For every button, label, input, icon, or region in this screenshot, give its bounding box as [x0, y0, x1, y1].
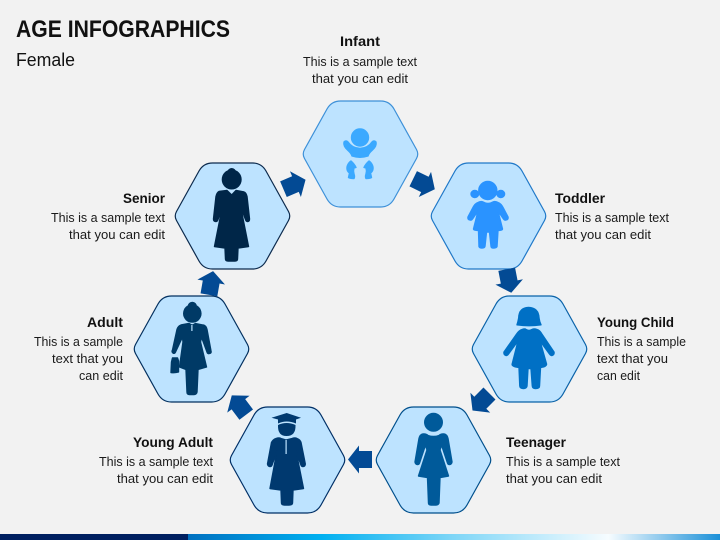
hexagon: senior	[175, 163, 290, 269]
arrow: young child to teenager	[463, 384, 499, 420]
graduation gown slit	[286, 440, 287, 454]
icon: adult with handbag	[171, 302, 211, 394]
title: AGE INFOGRAPHICS	[16, 16, 230, 43]
arrow: toddler to young child	[493, 267, 525, 295]
label: teenager: Teenager	[506, 434, 567, 450]
footer bar	[0, 534, 720, 540]
arrow: teenager to young adult	[348, 446, 372, 474]
label: infant: Infant	[340, 33, 380, 49]
label: young adult	[99, 434, 213, 486]
label: toddler	[555, 190, 669, 242]
label: senior: that you can edit	[69, 227, 165, 242]
arrow: infant to toddler	[407, 166, 441, 202]
label: teenager: This is a sample text	[506, 454, 620, 469]
label: infant	[303, 33, 417, 86]
arrow: adult to senior	[195, 269, 227, 297]
icon: teenager	[415, 414, 452, 505]
label: young child: Young Child	[597, 314, 674, 330]
label: adult: This is a sample	[34, 334, 123, 349]
label: toddler: that you can edit	[555, 227, 651, 242]
label: young adult: This is a sample text	[99, 454, 213, 469]
hexagon: teenager	[376, 407, 491, 513]
label: toddler: This is a sample text	[555, 210, 669, 225]
subtitle: Female	[16, 50, 75, 70]
label: young adult: that you can edit	[117, 471, 213, 486]
label: adult	[34, 314, 123, 383]
label: young adult: Young Adult	[133, 434, 213, 450]
hexagon: young adult	[230, 407, 345, 513]
label: senior: This is a sample text	[51, 210, 165, 225]
icon: young child	[504, 308, 554, 388]
icon: infant	[344, 129, 376, 178]
hexagon: young child	[472, 296, 587, 402]
label: teenager	[506, 434, 620, 486]
arrow: senior to infant	[278, 167, 311, 202]
icon: senior	[214, 168, 250, 261]
label: toddler: Toddler	[555, 190, 606, 206]
label: young child	[597, 314, 686, 383]
label: young child: can edit	[597, 368, 640, 383]
label: adult: text that you	[52, 351, 123, 366]
hexagon: infant	[303, 101, 418, 207]
label: senior: Senior	[123, 190, 166, 206]
label: adult: can edit	[79, 368, 123, 383]
hexagon: toddler	[431, 163, 546, 269]
label: adult: Adult	[87, 314, 123, 330]
label: young child: text that you	[597, 351, 668, 366]
hexagon: adult	[134, 296, 249, 402]
label: teenager: that you can edit	[506, 471, 602, 486]
arrow: young adult to adult	[221, 387, 257, 423]
icon: toddler	[468, 182, 508, 248]
label: infant: that you can edit	[312, 71, 408, 86]
label: senior	[51, 190, 166, 242]
icon: young adult with graduation cap	[268, 413, 305, 505]
blouse slit	[191, 325, 192, 331]
label: young child: This is a sample	[597, 334, 686, 349]
label: infant: This is a sample text	[303, 54, 417, 69]
